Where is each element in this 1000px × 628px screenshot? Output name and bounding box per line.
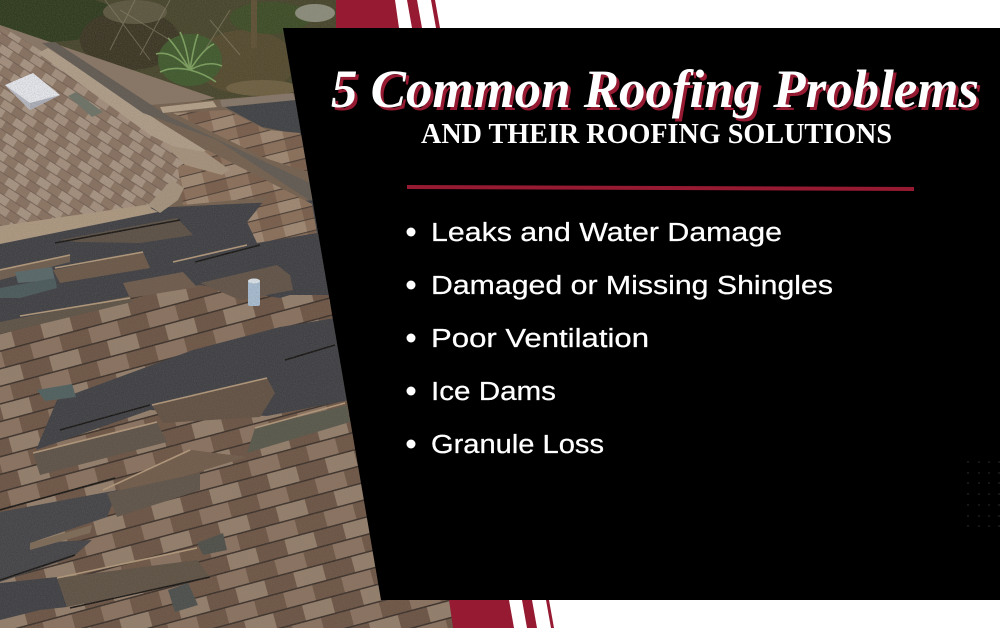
exposed underlayment D bbox=[0, 577, 67, 620]
base of roof behind valley bbox=[150, 93, 312, 208]
top red stripes bbox=[334, 0, 440, 28]
exposed underlayment C bbox=[0, 490, 118, 582]
red divider line bbox=[407, 185, 914, 191]
item: shingles: Damaged or Missing Shingles bbox=[431, 272, 833, 300]
item: ice dams: Ice Dams bbox=[431, 378, 556, 406]
hip end cap bbox=[149, 182, 184, 213]
grey roof patch bbox=[68, 92, 103, 117]
item: ventilation: Poor Ventilation bbox=[431, 325, 649, 353]
faint dot grid decoration bbox=[967, 461, 1000, 527]
photo grain bbox=[0, 0, 460, 628]
hip ridge cap bbox=[39, 48, 206, 152]
back roof plane bbox=[0, 25, 215, 105]
left shingled plane bbox=[0, 25, 184, 226]
subtitle: AND THEIR ROOFING SOLUTIONS bbox=[421, 118, 892, 150]
lower ridge cap bbox=[0, 205, 158, 244]
exposed underlayment B bbox=[36, 318, 350, 450]
teal wrap on roof bbox=[0, 267, 76, 401]
title: 5 Common Roofing Problems bbox=[331, 59, 979, 119]
curled shingles at hip bbox=[172, 147, 229, 175]
roof vent pipe bbox=[248, 278, 260, 306]
bullet list bbox=[406, 219, 833, 459]
black content panel bbox=[283, 28, 1000, 600]
upper right dark underlayment bbox=[225, 100, 302, 135]
torn shingle patches bbox=[0, 218, 350, 612]
upper right shingles bbox=[173, 110, 308, 172]
torn edge highlights bbox=[0, 245, 345, 578]
bottom red stripes bbox=[445, 600, 554, 628]
metal valley strip bbox=[42, 42, 312, 202]
black shadow lines under shingles bbox=[0, 220, 335, 608]
title: 5 Common Roofing Problems bbox=[334, 62, 982, 122]
upper ridge cap pieces bbox=[160, 93, 295, 113]
item: leaks: Leaks and Water Damage bbox=[431, 219, 782, 247]
white roof vent bbox=[5, 73, 60, 110]
foliage behind roof bbox=[0, 0, 340, 110]
main lower shingle mass bbox=[0, 285, 480, 628]
shingles below valley bbox=[178, 150, 317, 243]
item: granule loss: Granule Loss bbox=[431, 431, 604, 459]
photo: damaged roof with missing shingles bbox=[0, 0, 480, 628]
lower roof dark underlayment bbox=[0, 200, 470, 628]
